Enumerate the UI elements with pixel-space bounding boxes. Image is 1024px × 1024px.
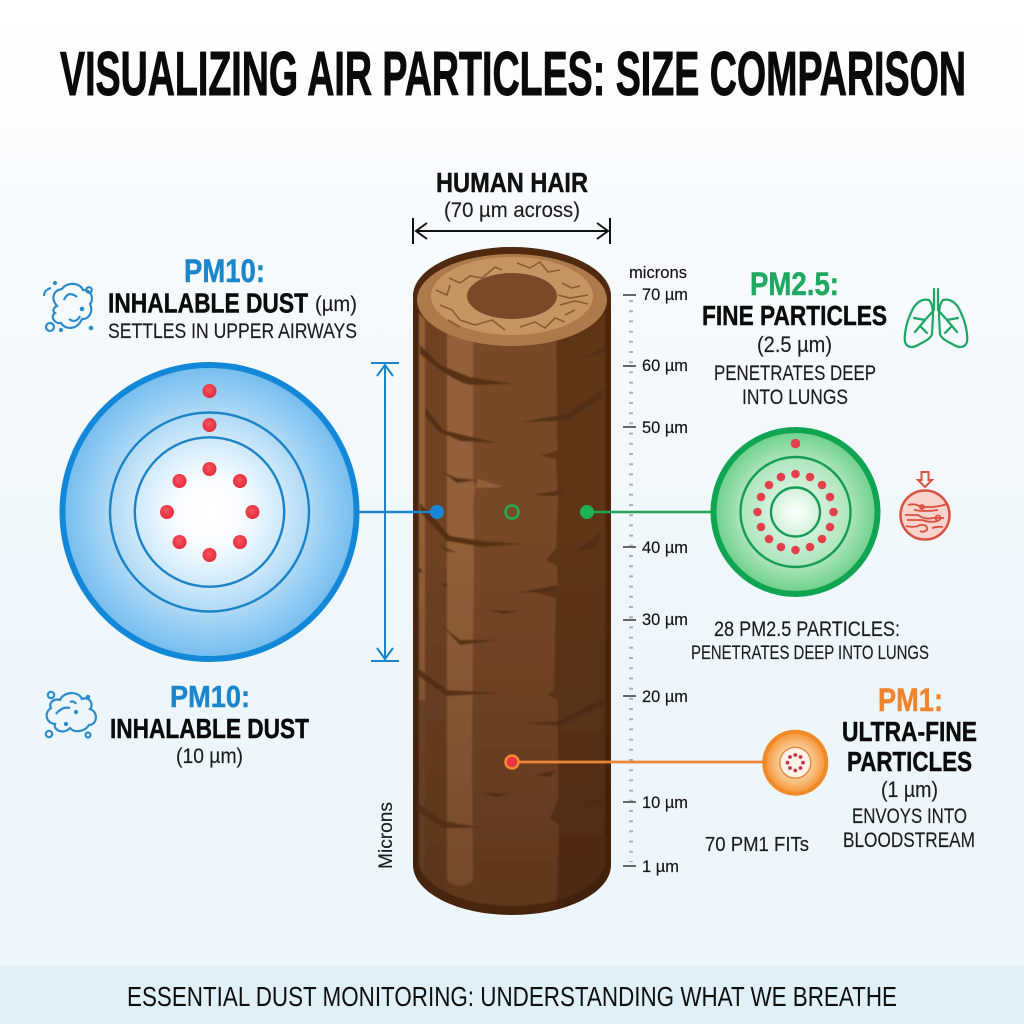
text: PM2.5 label	[702, 266, 887, 409]
text: PM1 label: ULTRA-FINE	[842, 716, 977, 747]
text: PM10 top label: SETTLES IN UPPER AIRWAYS	[108, 320, 357, 343]
axis label: microns vertical: Microns	[376, 802, 397, 869]
hair cylinder	[405, 240, 619, 920]
scale: microns ruler: 10 µm	[642, 793, 688, 812]
scale: microns ruler: 20 µm	[642, 687, 688, 706]
scale: microns ruler: 30 µm	[642, 610, 688, 629]
text: PM10 top label: (µm)	[315, 293, 357, 316]
connector: PM10	[359, 505, 444, 519]
text: PM2.5 fit note	[691, 618, 929, 664]
text: PM10 bottom label: PM10:	[170, 679, 250, 714]
icon: dust cloud top	[44, 282, 92, 331]
marker: hair center	[506, 506, 518, 518]
text: PM10 bottom label: INHALABLE DUST	[110, 713, 309, 744]
scale: microns ruler: 40 µm	[642, 538, 688, 557]
circle: PM1 particle diagram	[764, 732, 826, 794]
footer band	[0, 966, 1024, 1024]
text: PM1 label: (1 µm)	[881, 777, 938, 802]
scale: microns ruler: 50 µm	[642, 418, 688, 437]
scale: microns ruler: microns	[629, 264, 687, 282]
text: PM1 fit note: 70 PM1 FITs	[705, 834, 809, 856]
text: PM2.5 label: (2.5 µm)	[757, 332, 832, 357]
circle: PM10 particle diagram	[62, 365, 356, 659]
arrow: hair width	[413, 218, 610, 244]
text: PM2.5 label: PENETRATES DEEP	[714, 362, 876, 385]
text: PM10 bottom label: (10 µm)	[176, 745, 243, 768]
scale: microns ruler: 70 µm	[642, 285, 688, 304]
text: PM2.5 label: PM2.5:	[750, 266, 839, 302]
icon: dust cloud bottom	[46, 692, 96, 738]
text: PM1 label: ENVOYS INTO	[852, 805, 967, 828]
text: PM2.5 fit note: PENETRATES DEEP INTO LUNGS	[691, 643, 929, 664]
text: PM2.5 label: FINE PARTICLES	[702, 300, 887, 331]
circle: PM2.5 particle diagram	[714, 430, 878, 594]
text: PM2.5 label: INTO LUNGS	[742, 386, 848, 409]
heading: human hair: HUMAN HAIR	[436, 167, 588, 198]
text: PM10 top label: INHALABLE DUST	[108, 288, 308, 318]
scale: microns ruler: 60 µm	[642, 356, 688, 375]
text: PM1 label: BLOODSTREAM	[843, 829, 975, 852]
text: PM10 bottom label	[110, 679, 309, 768]
text: PM1 label	[842, 682, 977, 852]
connector: PM1	[506, 756, 765, 768]
text: PM1 label: PARTICLES	[847, 746, 972, 777]
text: PM10 top label: PM10:	[184, 253, 265, 289]
scale: microns ruler	[623, 264, 688, 876]
text: PM2.5 fit note: 28 PM2.5 PARTICLES:	[714, 618, 900, 641]
icon: lungs	[905, 289, 967, 347]
arrow: PM10 diameter	[371, 363, 399, 661]
text: PM10 top label	[108, 253, 357, 343]
heading: human hair	[436, 167, 588, 222]
icon: bloodstream	[900, 472, 950, 540]
scale: microns ruler: 1 µm	[642, 857, 679, 876]
heading: human hair: (70 µm across)	[444, 199, 580, 222]
text: PM1 label: PM1:	[878, 682, 943, 718]
connector: PM2.5	[580, 505, 712, 519]
